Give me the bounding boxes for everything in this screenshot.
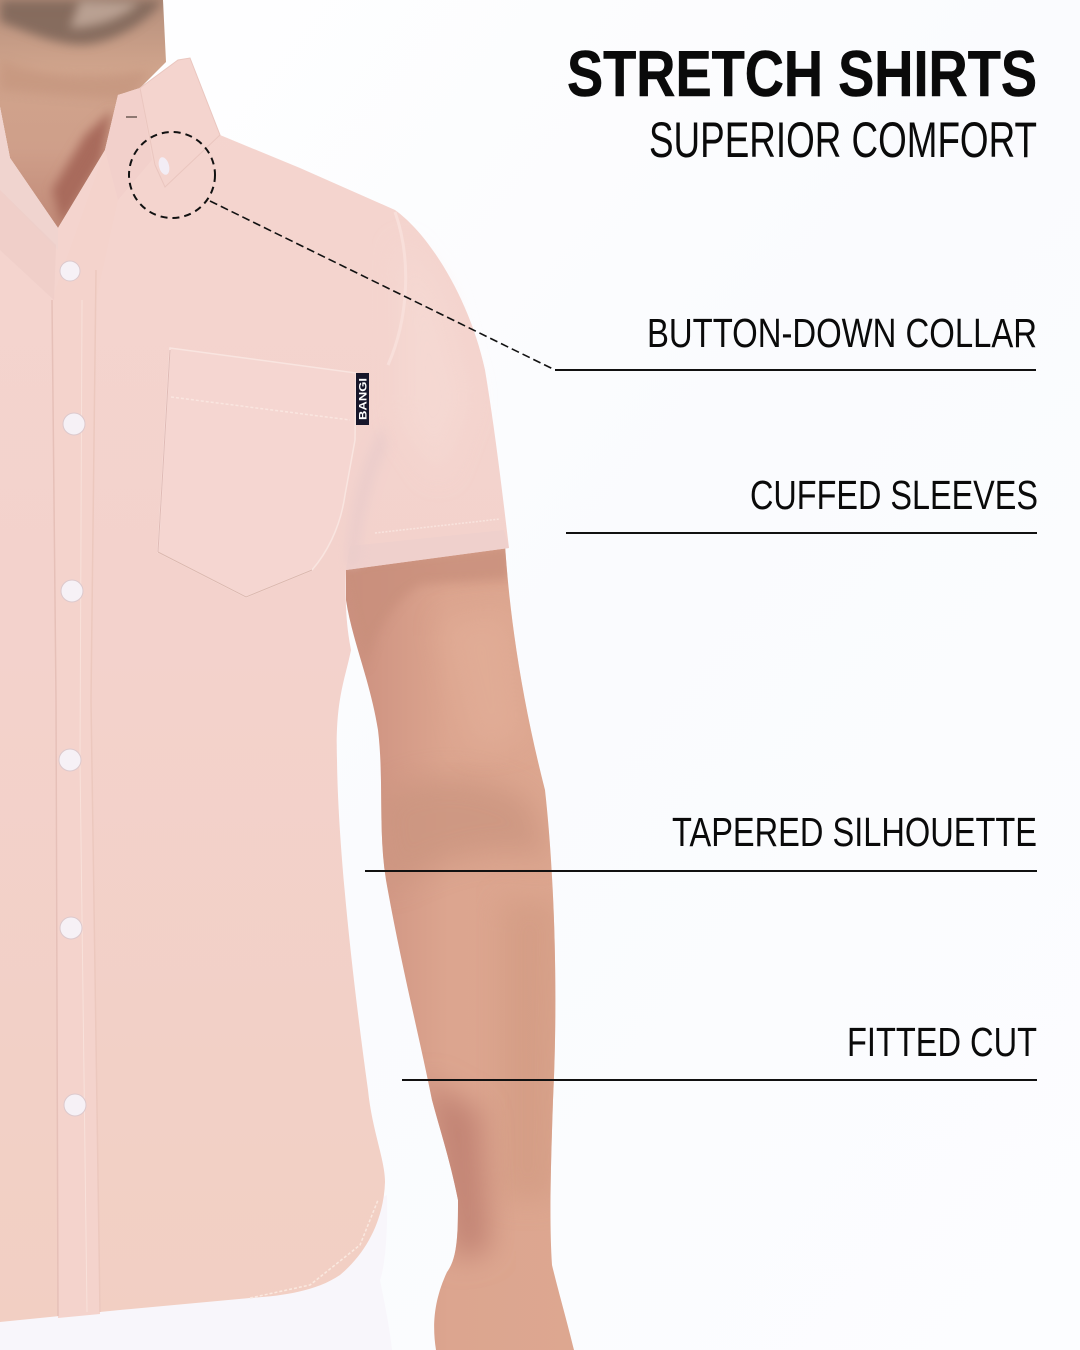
arm xyxy=(340,545,574,1350)
collar leaf xyxy=(140,58,220,187)
placket xyxy=(52,150,118,1318)
dashed leader line xyxy=(210,201,553,369)
neck and chin xyxy=(0,0,166,228)
shirt body and sleeve xyxy=(0,58,509,1322)
photo: model wearing shirt xyxy=(0,0,574,1350)
label: fitted cut: FITTED CUT xyxy=(847,1019,1037,1065)
shirt buttons xyxy=(59,261,86,1116)
white shorts xyxy=(0,1195,392,1350)
callout circle on collar xyxy=(129,132,215,218)
hem stitching xyxy=(250,1200,378,1298)
left collar xyxy=(0,107,58,250)
woven label xyxy=(356,373,370,425)
collar band xyxy=(105,88,152,200)
sleeve shading xyxy=(346,530,509,570)
woven label: BANGI xyxy=(358,378,370,420)
collar button xyxy=(157,156,171,176)
chest pocket xyxy=(158,348,356,597)
cuff stitching xyxy=(375,519,500,533)
armhole seam xyxy=(388,212,406,365)
